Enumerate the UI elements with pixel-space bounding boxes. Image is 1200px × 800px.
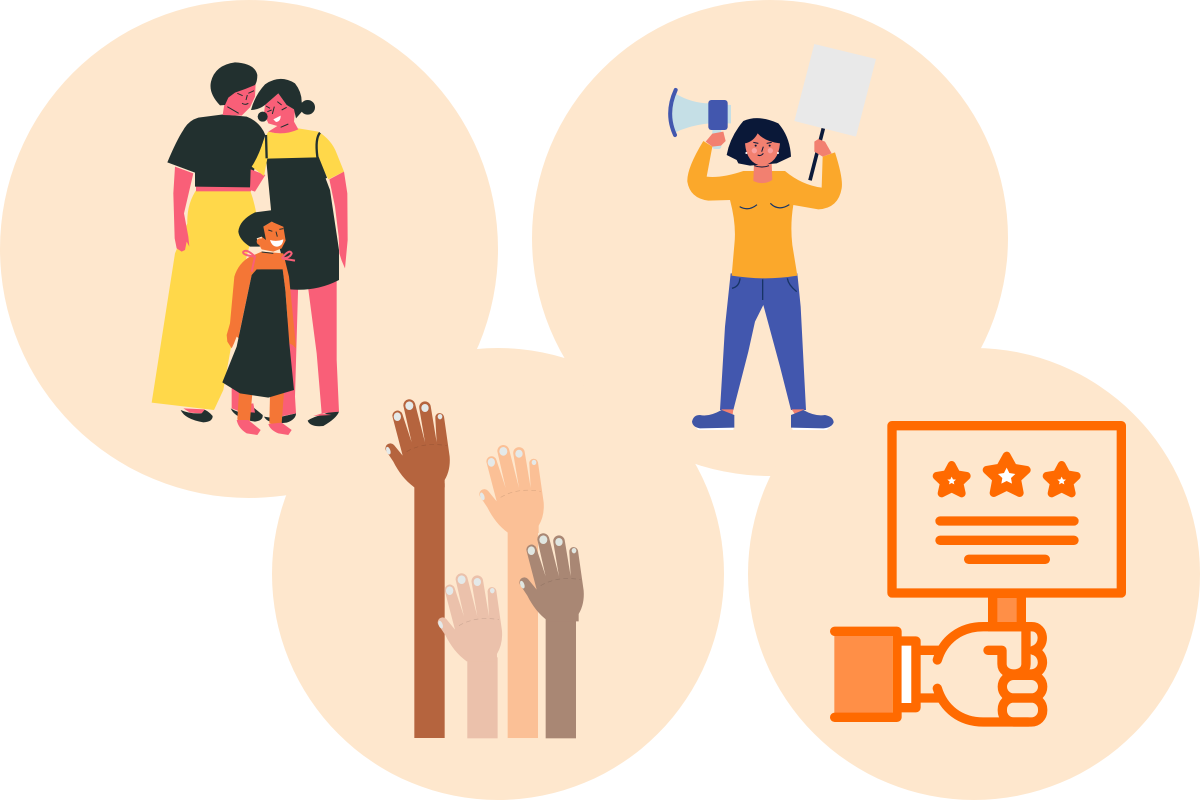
sign stick: [810, 128, 823, 180]
child's face: [257, 222, 286, 252]
illustration: raised hands: [385, 399, 584, 738]
protester's legs: [692, 273, 834, 430]
child's legs and sandals: [237, 392, 292, 435]
child's arms and shoulders: [227, 252, 296, 348]
pole: [993, 593, 1021, 627]
sign board: [892, 426, 1121, 593]
chest lines: [740, 203, 789, 209]
legs: adults: [183, 277, 339, 417]
shoes: [692, 410, 834, 430]
left fist: [706, 132, 726, 147]
neck: [753, 163, 772, 183]
skirt: yellow: [152, 188, 257, 410]
illustration: family of three: [152, 62, 348, 435]
head: [727, 118, 791, 167]
straps: [266, 133, 326, 178]
megaphone: [670, 90, 731, 149]
waistband: [196, 186, 251, 191]
jeans: [720, 273, 806, 410]
tee: left woman: [167, 114, 265, 187]
child's dress: [222, 269, 294, 398]
hand outline: [917, 627, 1043, 722]
star highlights: [947, 468, 1066, 484]
bows: [243, 251, 295, 272]
arm: right woman: [329, 172, 348, 268]
jeans details: [732, 278, 797, 300]
brown hand: [385, 399, 450, 738]
hand and cuff: [834, 593, 1043, 722]
pale hand: [437, 573, 502, 738]
tee: right woman: [252, 128, 344, 179]
dress: right woman: [266, 157, 339, 290]
right fist: [814, 139, 832, 157]
icon: rating sign held by hand: [834, 426, 1121, 722]
child: [222, 210, 296, 435]
arm: left woman: [173, 167, 193, 252]
peach hand: [479, 445, 544, 738]
head: left woman: [211, 62, 257, 116]
sleeve band: [902, 646, 911, 703]
grey-brown hand: [519, 533, 584, 738]
stars: [937, 456, 1077, 493]
sweater: [687, 141, 842, 278]
sandals: [181, 406, 339, 426]
blank sign: [794, 44, 876, 137]
illustration: protester upper body: [670, 44, 876, 278]
child's hair: [238, 210, 283, 247]
head: right woman: [251, 79, 315, 133]
hidden arm: right woman: [250, 169, 265, 192]
cuff: [834, 633, 892, 715]
ankles: [722, 409, 804, 414]
review text lines: [940, 521, 1074, 559]
